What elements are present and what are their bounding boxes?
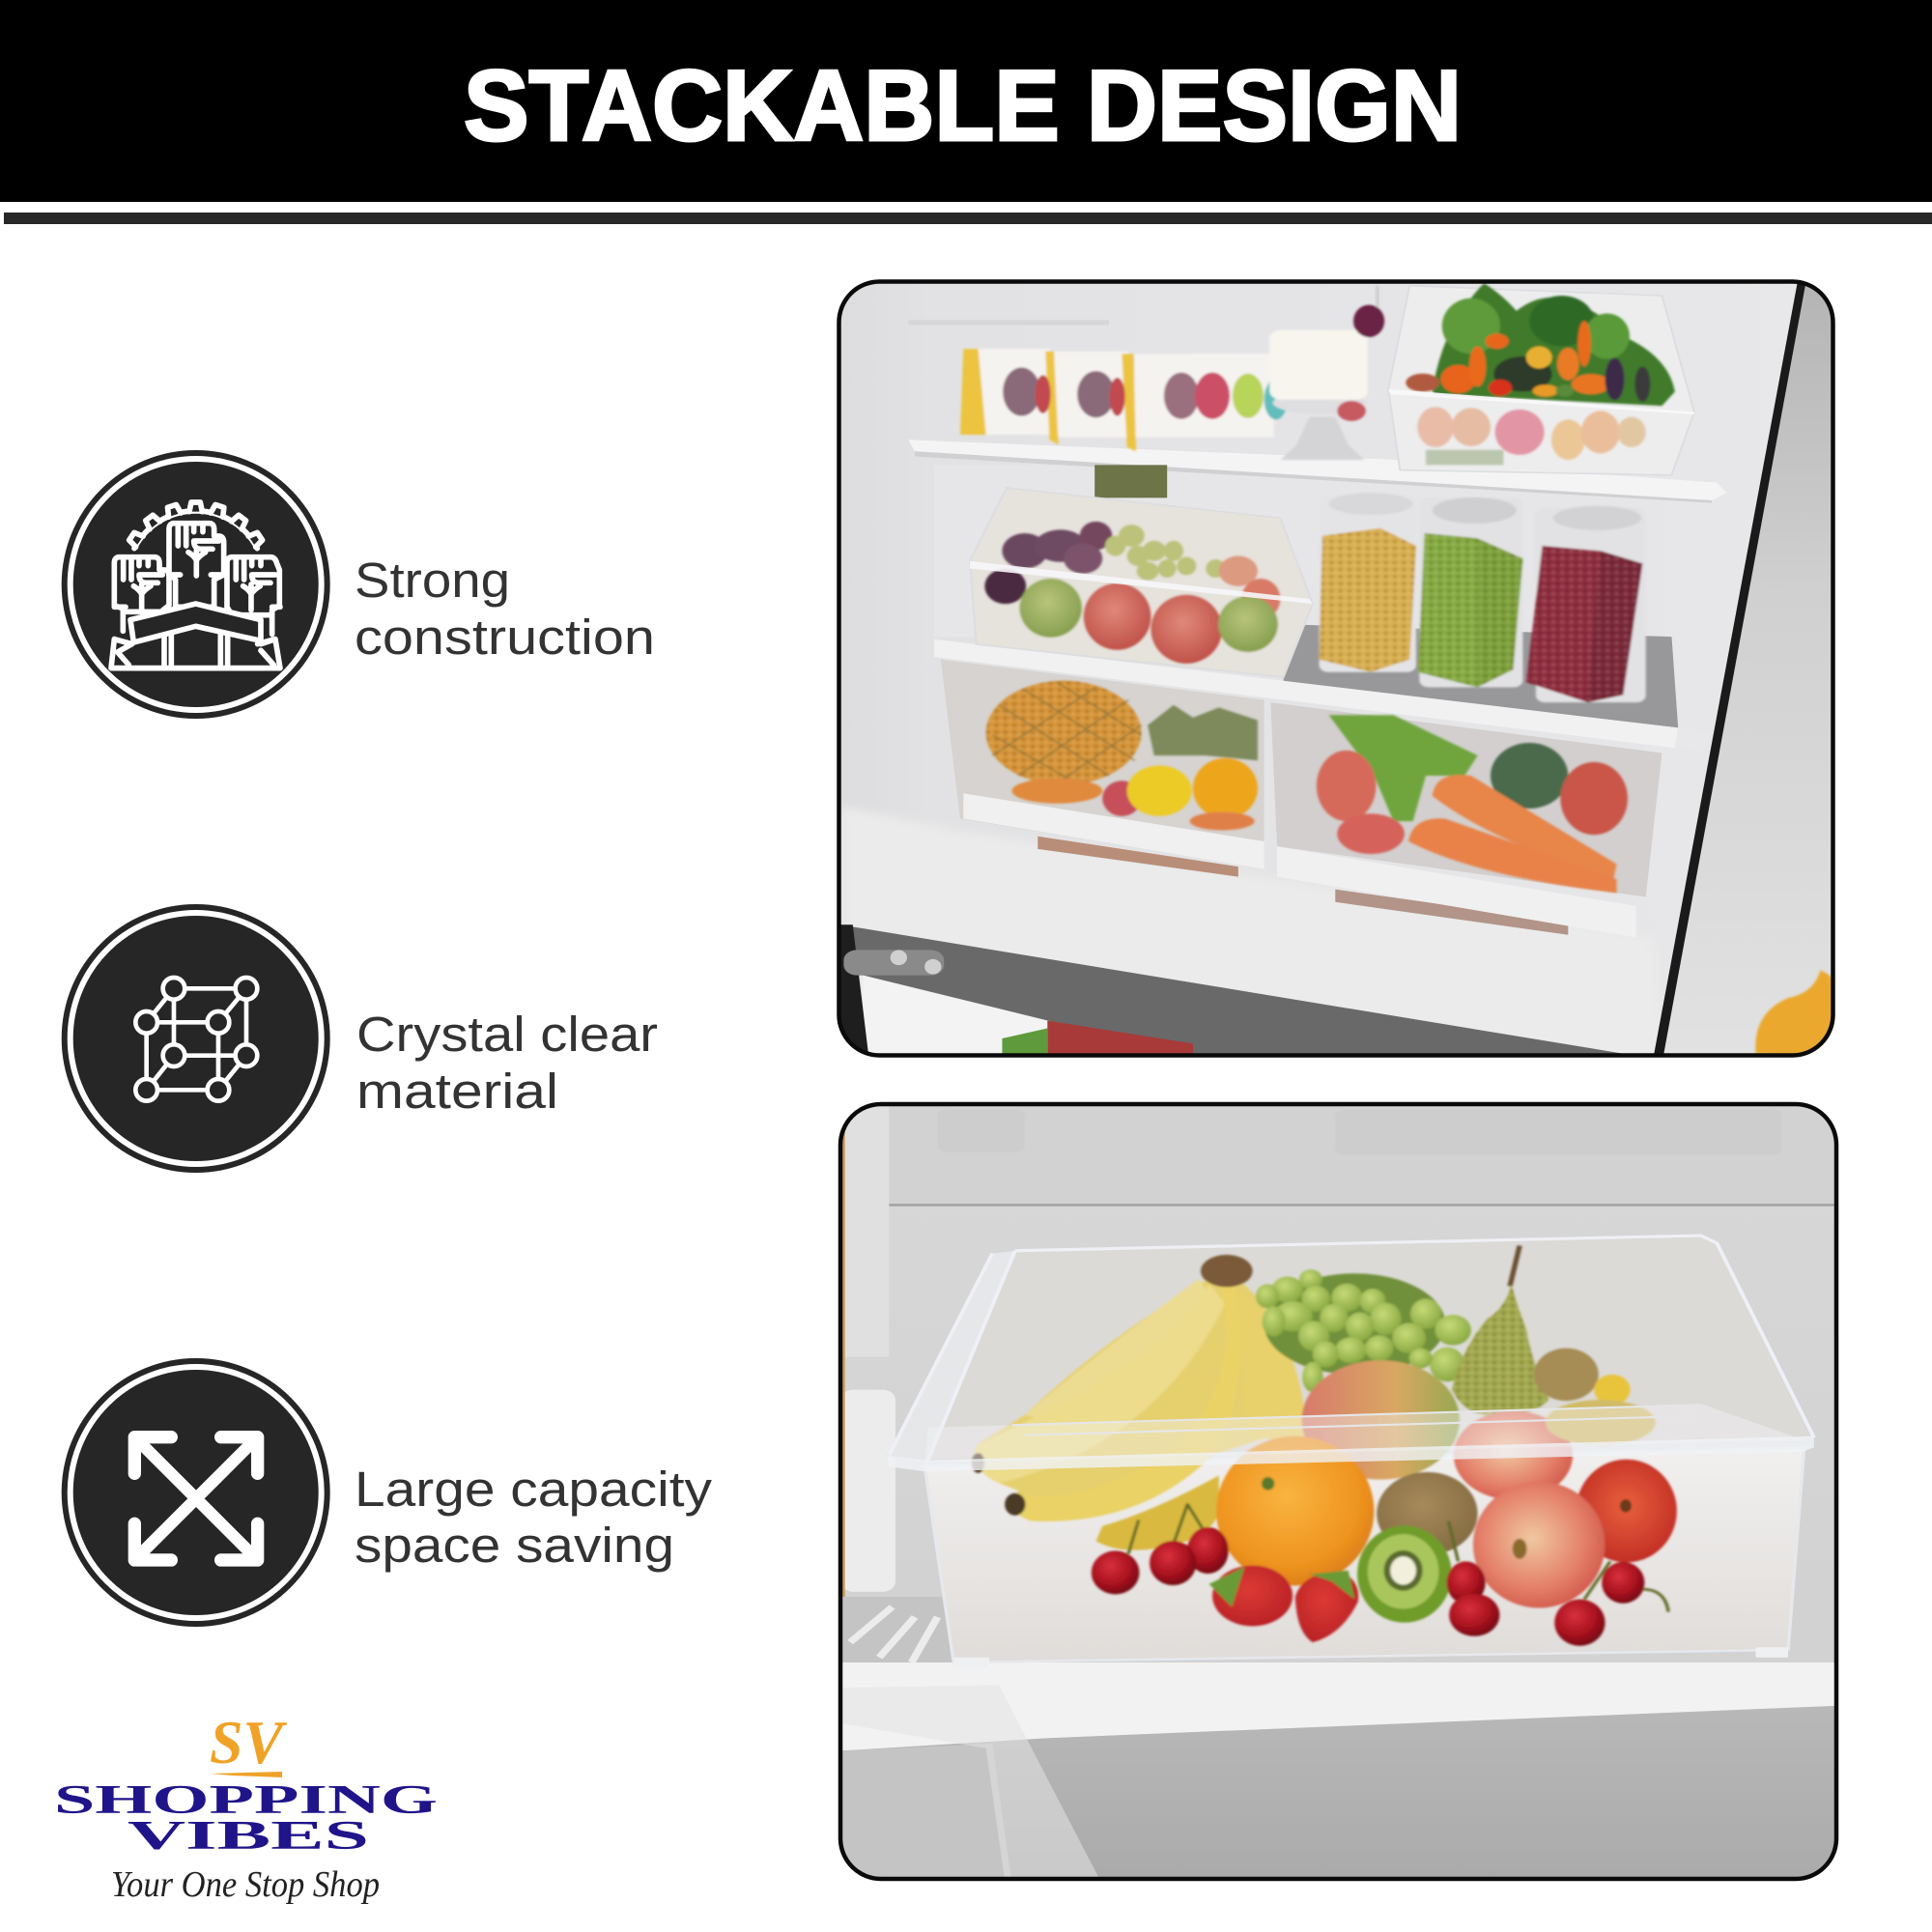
door edge and seal bbox=[1654, 284, 1832, 1053]
header banner bbox=[0, 0, 1932, 202]
kiwi slice bbox=[1357, 1525, 1452, 1623]
jar of red powder bbox=[1526, 506, 1646, 702]
fridge shelf and lower compartment bbox=[840, 1597, 1846, 1885]
logo tagline: Your One Stop Shop bbox=[111, 1864, 380, 1905]
mango bbox=[1301, 1360, 1460, 1480]
feature: strong construction bbox=[62, 450, 655, 719]
middle shelf bbox=[934, 639, 1711, 751]
label: strong construction: construction bbox=[355, 610, 655, 665]
brand logo bbox=[54, 1708, 438, 1905]
label: large capacity space saving: space saving bbox=[355, 1518, 674, 1573]
label: crystal clear material: material bbox=[356, 1064, 558, 1119]
icon: fists and gear badge bbox=[62, 450, 330, 719]
front apple bbox=[1473, 1482, 1605, 1608]
label: large capacity space saving: Large capacity bbox=[355, 1462, 713, 1517]
whole kiwi bbox=[1377, 1472, 1478, 1555]
lemon slice bbox=[1594, 1375, 1631, 1405]
feature: large capacity space saving bbox=[62, 1358, 713, 1627]
yellow fruit back right bbox=[1546, 1400, 1656, 1445]
nectarine bbox=[1576, 1460, 1677, 1562]
macaron cards bbox=[960, 349, 1288, 451]
glass shelf surface bbox=[1284, 624, 1678, 727]
left crisper drawer with pineapple bbox=[941, 660, 1264, 877]
icon: cube network badge bbox=[62, 904, 330, 1173]
kiwi behind pear bbox=[1534, 1349, 1599, 1401]
label: large capacity space saving bbox=[355, 1462, 713, 1573]
strawberries bbox=[1209, 1566, 1358, 1642]
clear plastic bin body bbox=[889, 1236, 1814, 1667]
fruit bin on middle shelf bbox=[970, 488, 1313, 677]
bananas bbox=[972, 1255, 1305, 1550]
pear bbox=[1452, 1246, 1548, 1415]
logo wordmark line one: SHOPPING bbox=[54, 1778, 438, 1823]
header rule bbox=[4, 213, 1932, 224]
jar of green powder bbox=[1418, 497, 1522, 687]
logo underline bbox=[211, 1772, 282, 1777]
glass candle on stand bbox=[1269, 286, 1384, 460]
right crisper drawer with carrots bbox=[1270, 702, 1662, 937]
label: strong construction: Strong bbox=[355, 553, 510, 608]
vegetable bin on top shelf bbox=[1388, 283, 1694, 475]
cherries bbox=[1092, 1503, 1668, 1646]
fridge back wall bbox=[842, 1106, 1834, 1750]
logo wordmark line two: VIBES bbox=[128, 1814, 369, 1859]
fruit arrangement bbox=[972, 1246, 1677, 1646]
logo monogram SV: SV bbox=[210, 1708, 288, 1776]
lower divider and freezer bbox=[840, 924, 1621, 1053]
label: strong construction bbox=[355, 553, 655, 665]
upper shelf bbox=[908, 440, 1726, 503]
feature: crystal clear material bbox=[62, 904, 658, 1173]
jar of chickpeas bbox=[1320, 493, 1416, 672]
bin rim overlay bbox=[888, 1236, 1814, 1471]
label: crystal clear material bbox=[356, 1007, 658, 1119]
photo panel: single bin with fruit on fridge shelf bbox=[831, 1092, 1846, 1885]
photo panel: fridge interior with stacked bins bbox=[831, 270, 1846, 1064]
grapes bbox=[1256, 1269, 1471, 1392]
title: STACKABLE DESIGN bbox=[464, 50, 1462, 162]
back apple bbox=[1454, 1411, 1573, 1500]
orange bbox=[1216, 1436, 1374, 1585]
icon: expand arrows badge bbox=[62, 1358, 330, 1627]
fridge interior walls bbox=[831, 270, 1846, 1064]
label: crystal clear material: Crystal clear bbox=[356, 1007, 658, 1062]
